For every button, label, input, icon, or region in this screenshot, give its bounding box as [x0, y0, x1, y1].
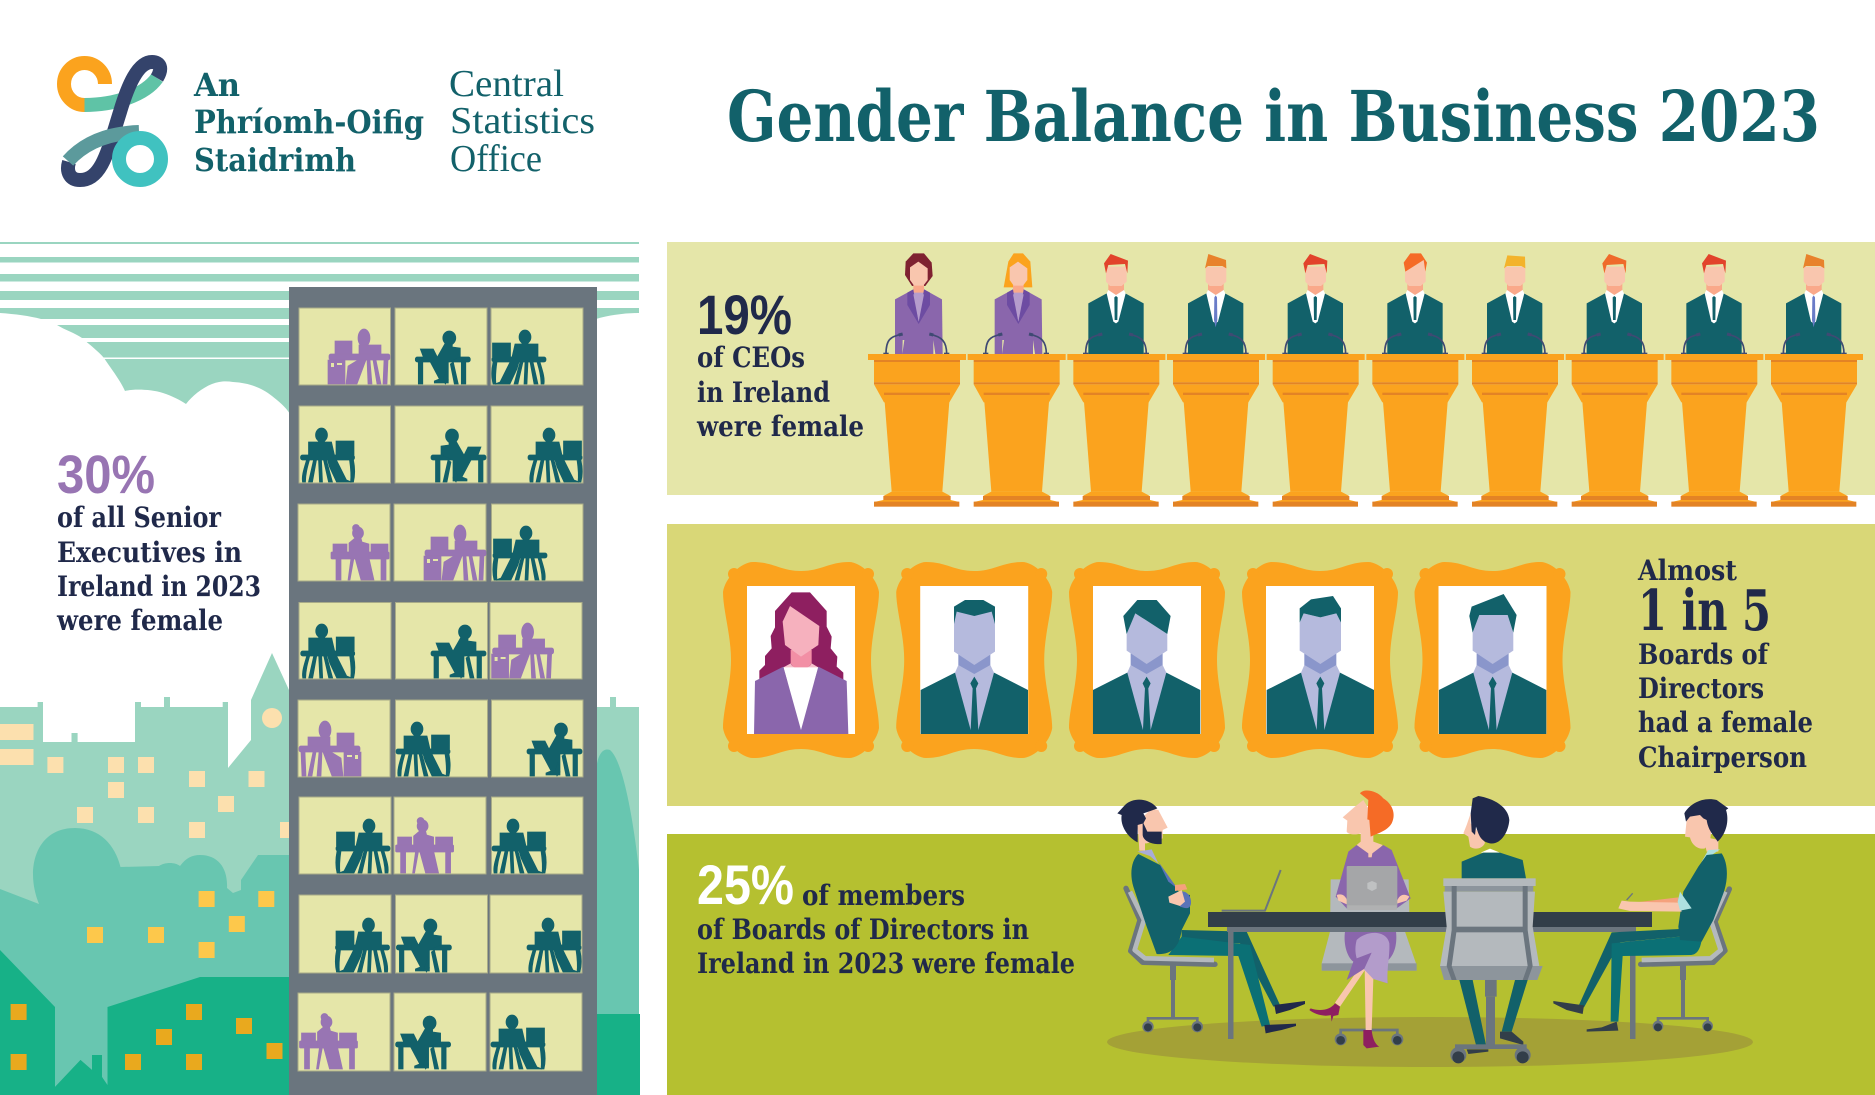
meeting scene: right men: [1440, 796, 1729, 1063]
woman with laptop: [1309, 791, 1417, 1048]
meeting scene: left man and woman: [1117, 791, 1417, 1048]
stat 25% and description: 25%: [697, 853, 794, 916]
skyline front layer: [0, 950, 640, 1095]
male CEO 3: [1267, 254, 1365, 507]
text: 30% senior executives: [56, 445, 261, 637]
floor shadow: [1107, 1017, 1753, 1067]
seated man with pen: [1553, 799, 1729, 1032]
male CEO 6: [1566, 254, 1664, 507]
logo mark: [64, 62, 161, 180]
man seen from behind in chair: [1440, 796, 1543, 1063]
portrait: male 2: [1069, 562, 1225, 758]
chairperson text: 1 in 5: [1638, 578, 1771, 644]
panel: senior executives illustration: [0, 242, 640, 1095]
stat 25% and description: Ireland in 2023 were female: [697, 947, 1075, 980]
chairperson text: Boards of: [1638, 638, 1770, 671]
chairperson text: [1637, 554, 1813, 774]
CEO description: [696, 341, 864, 443]
female CEO 1: [868, 253, 966, 507]
logo Irish name: An: [193, 66, 240, 104]
laptop: [1222, 870, 1281, 912]
male CEO 7: [1665, 254, 1763, 507]
male CEO 4: [1366, 253, 1464, 507]
description: of all Senior: [57, 501, 222, 534]
stat 25% and description: [697, 853, 1075, 980]
panel: boards chairperson: [667, 524, 1875, 806]
office building: [289, 287, 597, 1095]
female CEO 2: [968, 253, 1066, 507]
stat 25% and description: of members: [802, 879, 965, 912]
logo English name: Central: [449, 63, 564, 105]
meeting table: [1208, 912, 1652, 1039]
chairperson text: had a female: [1638, 706, 1813, 739]
portrait: male 3: [1242, 562, 1398, 758]
skyline back layer: [0, 653, 639, 1095]
stat 25% and description: of Boards of Directors in: [697, 913, 1029, 946]
logo English name: Statistics: [450, 100, 595, 142]
portrait: male 4: [1414, 562, 1570, 758]
description: Ireland in 2023: [57, 570, 261, 603]
chairperson text: Chairperson: [1638, 741, 1807, 774]
logo Irish name: Phríomh-Oifig: [194, 103, 424, 141]
description: [56, 501, 261, 637]
logo English name: Office: [450, 138, 542, 180]
CEO description: were female: [696, 410, 864, 443]
portrait: male 1: [896, 562, 1052, 758]
stat 19%: 19%: [697, 283, 792, 346]
chairperson text: Directors: [1638, 672, 1764, 705]
stat 30%: 30%: [57, 445, 155, 505]
male CEO 5: [1466, 255, 1564, 507]
logo: [64, 62, 595, 180]
CEO description: of CEOs: [697, 341, 805, 374]
CEO description: in Ireland: [697, 376, 830, 409]
logo Irish name: Staidrimh: [194, 141, 356, 179]
skyline middle layer: [0, 750, 639, 1095]
description: Executives in: [57, 536, 242, 569]
office workers: [299, 329, 582, 1069]
male CEO 1: [1067, 254, 1165, 507]
logo English name: [449, 63, 595, 180]
logo Irish name: [193, 66, 424, 179]
chairperson text: Almost: [1637, 554, 1737, 587]
man with beard: [1117, 800, 1305, 1033]
panel: board members: [667, 791, 1875, 1095]
male CEO 2: [1167, 254, 1265, 507]
description: were female: [56, 604, 223, 637]
male CEO 8: [1765, 254, 1863, 507]
portrait: female chairperson: [723, 562, 879, 758]
panel: CEOs: [667, 242, 1875, 507]
